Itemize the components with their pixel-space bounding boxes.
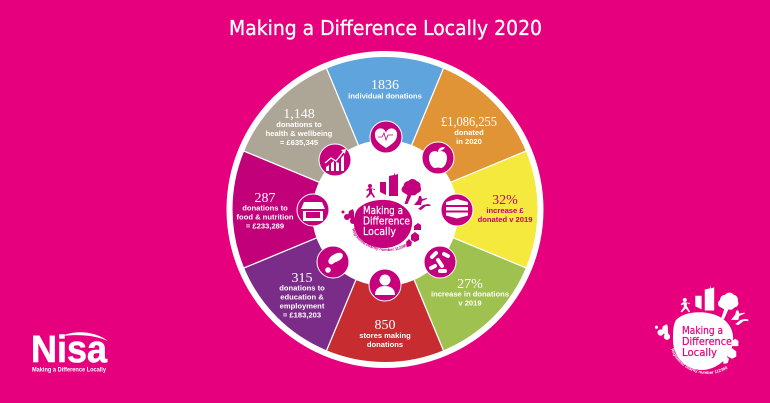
corner logo: Registered charity number 1123803 — [671, 348, 728, 374]
icon: pills — [424, 246, 456, 278]
text: donated in 2020: £1,086,255 — [441, 115, 497, 130]
inner white circle — [312, 140, 458, 286]
text: increase in pounds: increase £ — [486, 206, 524, 215]
text: donated in 2020 — [441, 115, 497, 146]
title: Making a Difference Locally 2020 — [229, 16, 542, 40]
text: stores making donations: 850 — [374, 318, 396, 333]
corner logo: Making a — [682, 324, 723, 337]
text: stores making donations: stores making — [359, 331, 411, 340]
text: health and wellbeing: donations to — [276, 120, 322, 129]
Nisa logo: Making a Difference Locally — [32, 366, 107, 374]
text: education and employment — [279, 271, 325, 320]
text: health and wellbeing: health & wellbeing — [266, 129, 333, 138]
text: education and employment: employment — [280, 302, 325, 310]
icon: apple — [422, 142, 454, 174]
segment: stores making donations — [326, 210, 444, 363]
corner logo: Difference — [682, 335, 732, 348]
centre logo: Registered charity number 1123803 — [352, 228, 407, 251]
text: education and employment: education & — [280, 292, 324, 302]
icon: market stall — [297, 194, 329, 226]
segment: food and nutrition — [232, 151, 385, 268]
text: increase in donations: increase in donations — [431, 290, 509, 298]
text: food and nutrition: food & nutrition — [237, 212, 294, 222]
centre logo: Difference — [363, 216, 410, 228]
text: donated in 2020: in 2020 — [456, 137, 482, 146]
text: increase in donations: 27% — [457, 277, 483, 292]
icon: heart — [370, 121, 402, 153]
text: increase in pounds — [478, 193, 532, 224]
segment: health and wellbeing — [244, 68, 385, 209]
text: education and employment: = £183,203 — [283, 310, 321, 320]
text: increase in donations — [431, 277, 509, 308]
donut wheel — [226, 51, 544, 368]
icon: growth chart — [319, 144, 351, 176]
text: food and nutrition: = £233,289 — [246, 222, 284, 230]
text: food and nutrition: 287 — [254, 191, 276, 206]
segment: increase in donations — [385, 210, 526, 351]
text: food and nutrition — [237, 191, 294, 230]
centre logo: Locally — [363, 226, 396, 238]
text: education and employment: 315 — [292, 271, 312, 286]
text: increase in pounds: 32% — [492, 193, 518, 208]
segment: individual donations — [326, 56, 444, 210]
text: individual donations: individual donations — [348, 92, 422, 100]
icon: helping hand — [317, 246, 349, 278]
centre logo — [342, 172, 431, 251]
segment: increase in pounds — [385, 151, 538, 268]
text: health and wellbeing: = £635,345 — [280, 138, 319, 147]
icon: person — [369, 269, 401, 301]
text: increase in donations: v 2019 — [458, 298, 482, 308]
text: health and wellbeing: 1,148 — [283, 107, 315, 122]
text: stores making donations: donations — [367, 340, 403, 349]
segment: donated in 2020 — [385, 68, 526, 209]
text: donated in 2020: donated — [454, 128, 484, 137]
text: education and employment: donations to — [279, 284, 325, 292]
centre logo: Making a — [363, 205, 403, 217]
text: health and wellbeing — [266, 107, 333, 147]
text: individual donations: 1836 — [371, 78, 399, 93]
text: food and nutrition: donations to — [242, 204, 288, 212]
segment: education and employment — [244, 210, 385, 351]
corner logo: Locally — [682, 346, 717, 359]
icon: stacked layers — [441, 194, 473, 226]
text: individual donations — [348, 78, 422, 100]
text: increase in pounds: donated v 2019 — [478, 215, 532, 224]
text: stores making donations — [359, 318, 411, 349]
Nisa logo: Nisa — [31, 329, 108, 371]
